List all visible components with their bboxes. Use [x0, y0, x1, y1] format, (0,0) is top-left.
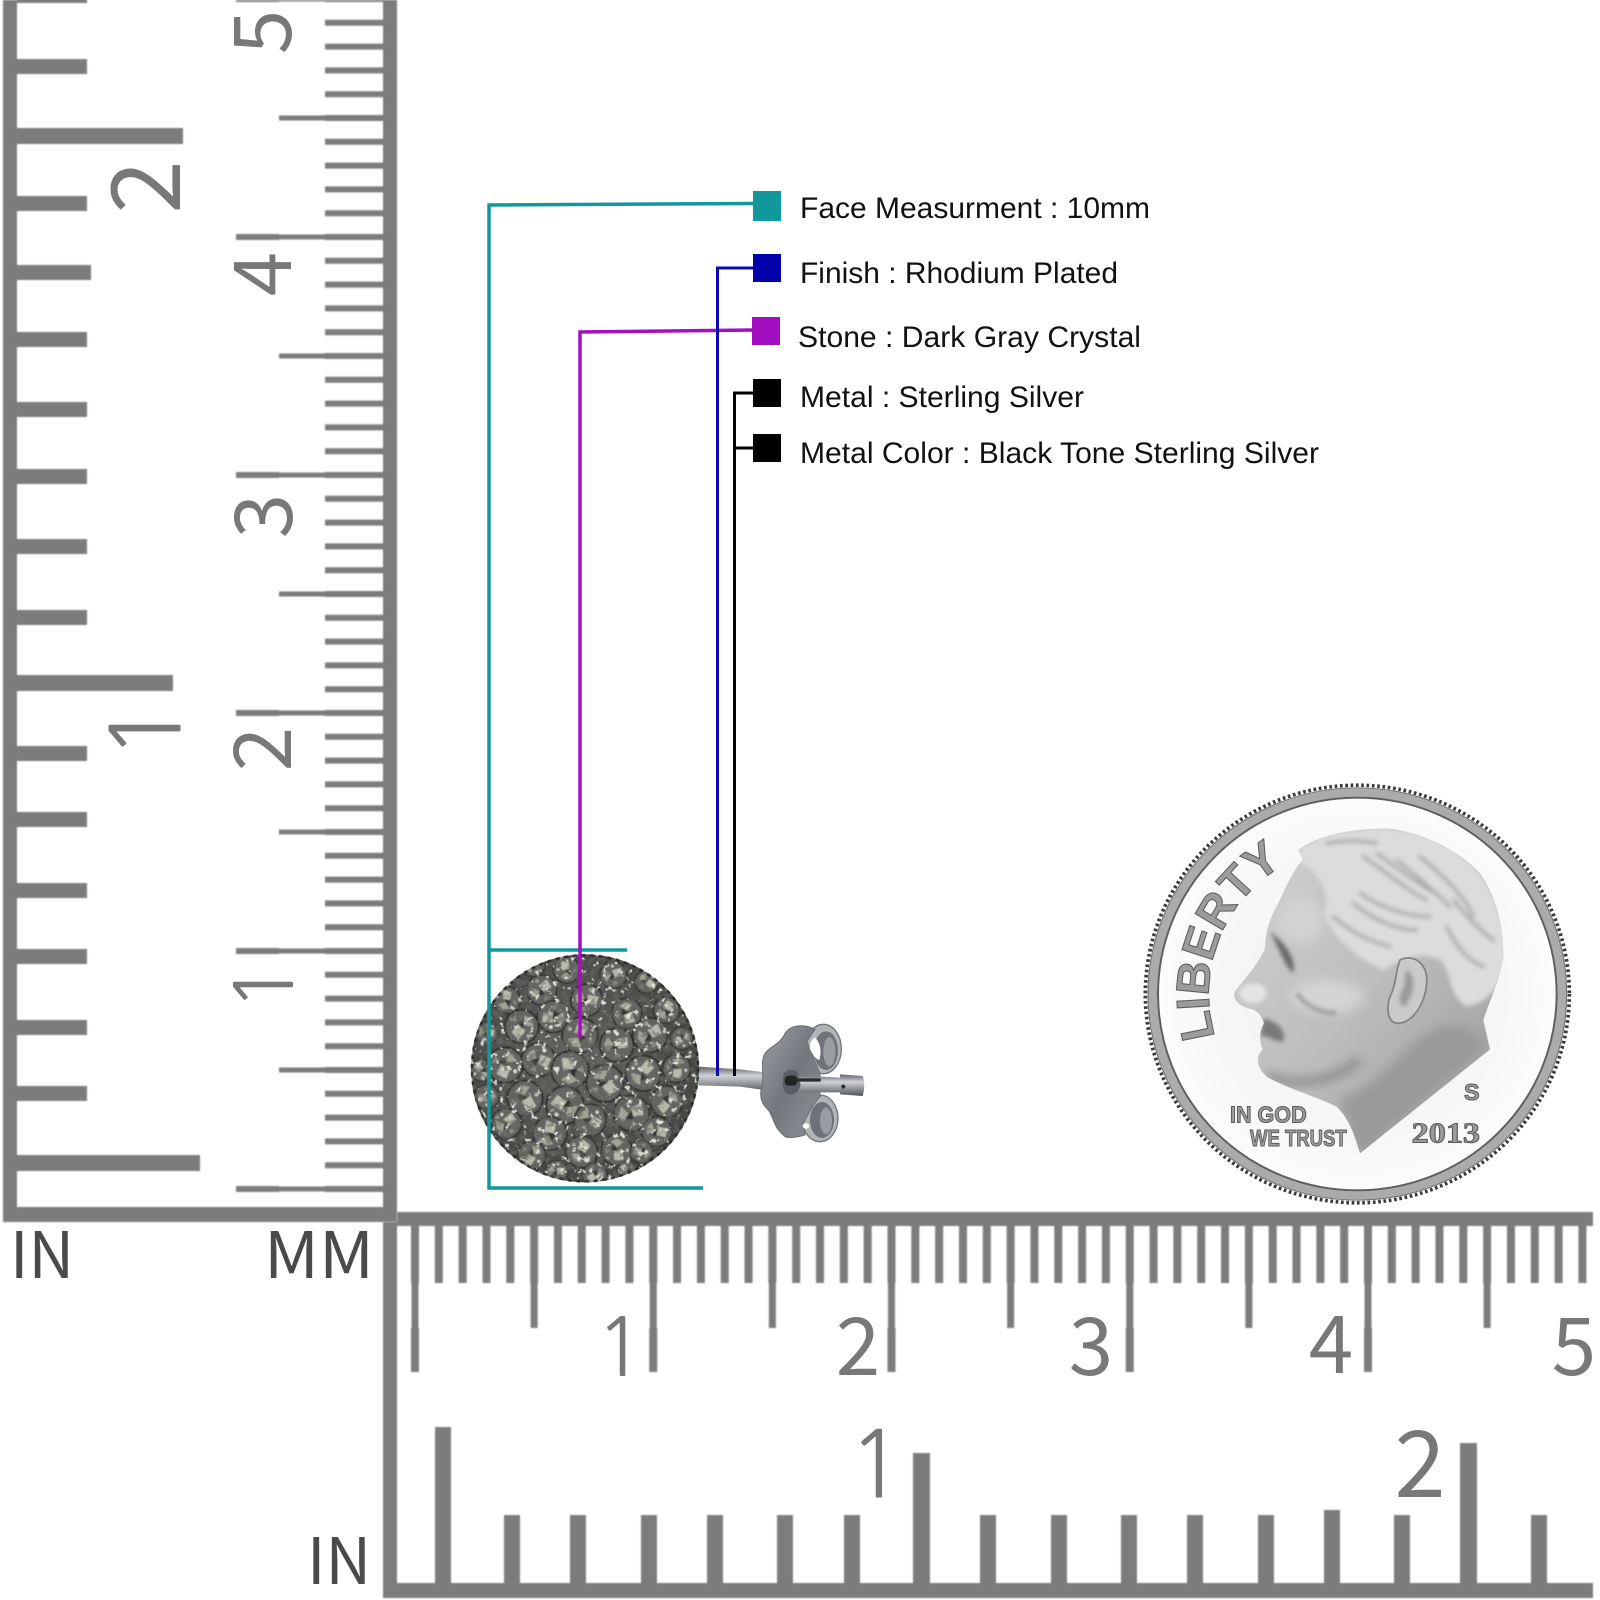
bottom ruler frame — [383, 1212, 1593, 1598]
left ruler millimetre numbers — [199, 10, 316, 1011]
legend text: metal: Metal : Sterling Silver — [800, 381, 1084, 414]
text: IN GOD: IN GOD — [1230, 1102, 1307, 1128]
bottom ruler millimetre numbers: 3 — [1069, 1283, 1113, 1399]
left ruler millimetre numbers: 3 — [200, 494, 316, 538]
legend swatch: purple — [752, 317, 780, 345]
legend text: finish: Finish : Rhodium Plated — [800, 257, 1118, 290]
legend text: metal color: Metal Color : Black Tone Sterling Silver — [800, 437, 1319, 470]
earring stud — [698, 1024, 864, 1142]
butterfly back — [761, 1024, 864, 1142]
post through back — [783, 1074, 864, 1096]
neck shadow — [1340, 1025, 1487, 1157]
portrait — [1234, 828, 1507, 1157]
left ruler millimetre numbers: 4 — [199, 252, 315, 296]
leader lines — [489, 204, 754, 1188]
bottom ruler inch numbers — [848, 1391, 1446, 1524]
earring post shaft — [698, 1067, 783, 1093]
hair strands — [1327, 841, 1493, 967]
left ruler millimetre numbers: 2 — [199, 727, 315, 771]
leader: face measurement — [489, 204, 754, 1188]
left ruler frame — [3, 0, 397, 1222]
left ruler millimetre numbers: 5 — [199, 10, 315, 54]
left ruler inch numbers: 2 — [69, 160, 208, 214]
left ruler millimetre numbers: 1 — [225, 963, 305, 1011]
legend text: stone: Stone : Dark Gray Crystal — [798, 321, 1141, 354]
millimetre ticks — [411, 1254, 1593, 1350]
bottom ruler inch numbers: 1 — [848, 1419, 904, 1511]
ball rim — [472, 955, 698, 1181]
left ruler inch numbers — [69, 160, 208, 760]
dime coin — [1144, 783, 1572, 1205]
text: mint mark S: S — [1464, 1079, 1480, 1105]
legend text: face measurement: Face Measurment : 10mm — [800, 192, 1150, 225]
inch tick marks — [17, 0, 200, 1171]
bottom ruler millimetre numbers: 5 — [1552, 1283, 1596, 1399]
unit labels — [10, 1205, 374, 1600]
ear — [1388, 958, 1427, 1023]
rhinestones — [466, 950, 700, 1192]
ring opening bottom — [803, 1123, 809, 1129]
millimetre tick marks — [258, 0, 354, 1192]
bottom ruler millimetre numbers — [596, 1281, 1596, 1399]
text: WE TRUST: WE TRUST — [1250, 1125, 1347, 1151]
label: IN left: IN — [10, 1205, 74, 1297]
hair — [1293, 829, 1507, 1007]
text: 2013: 2013 — [1412, 1119, 1480, 1150]
ring opening top — [810, 1037, 821, 1060]
left vertical ruler — [3, 0, 397, 1222]
cheek highlight — [1290, 980, 1363, 1013]
leader: stone — [580, 330, 754, 1038]
eye and mouth shadows — [1270, 932, 1294, 973]
back plate — [761, 1026, 820, 1137]
bottom ruler millimetre numbers: 4 — [1309, 1281, 1353, 1397]
post collar — [783, 1070, 801, 1095]
jaw shadow — [1267, 1060, 1360, 1082]
leader: finish — [718, 268, 754, 1076]
bottom horizontal ruler — [383, 1212, 1593, 1598]
legend swatch: blue — [753, 254, 781, 282]
label: MM: MM — [264, 1205, 374, 1297]
inch ticks — [435, 1427, 1547, 1583]
left ruler inch numbers: 1 — [98, 702, 194, 760]
back ring bottom — [802, 1095, 838, 1142]
back ring top — [805, 1024, 841, 1074]
legend — [752, 191, 1319, 470]
crystal pave ball — [466, 950, 700, 1192]
text: LIBERTY: LIBERTY — [1176, 838, 1274, 1041]
coin body and rim — [1145, 785, 1569, 1203]
legend swatch: black metal color — [753, 434, 781, 462]
legend swatch: teal — [753, 191, 781, 221]
leader: metal — [734, 393, 754, 1076]
bottom ruler millimetre numbers: 2 — [836, 1283, 880, 1399]
coin lettering — [1176, 838, 1480, 1151]
bottom ruler millimetre numbers: 1 — [596, 1308, 644, 1388]
bottom ruler inch numbers: 2 — [1394, 1391, 1446, 1524]
legend swatch: black metal — [753, 379, 781, 407]
